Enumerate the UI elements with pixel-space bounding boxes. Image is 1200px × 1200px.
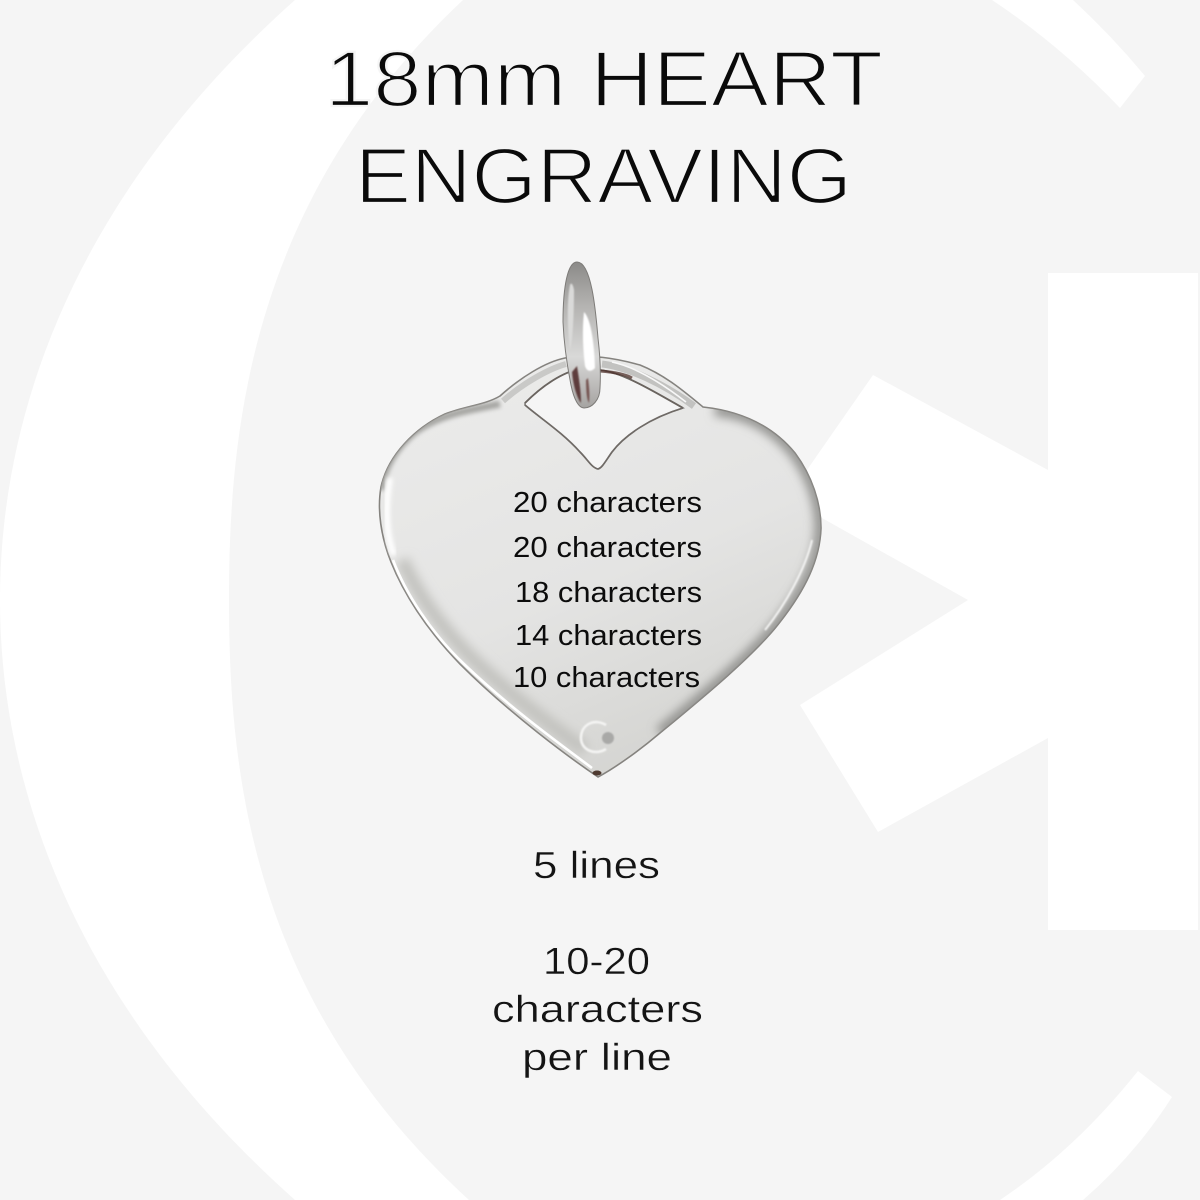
title: ENGRAVING [355, 131, 852, 220]
engraving character guide [513, 487, 702, 694]
characters per line text: characters [492, 989, 703, 1031]
heart body with bale [379, 356, 821, 777]
title: 18mm HEART [325, 34, 883, 123]
soft edge shading [381, 404, 821, 768]
jump ring [563, 262, 600, 408]
heart tip mark [592, 770, 602, 776]
maker stamp [581, 722, 614, 752]
characters per line text [492, 941, 703, 1079]
line count text: 5 lines [533, 845, 660, 887]
characters per line text: per line [522, 1037, 672, 1079]
engraving character guide: 10 characters [513, 662, 700, 694]
title [325, 34, 883, 220]
engraving character guide: 20 characters [513, 487, 702, 519]
bale [503, 362, 694, 469]
engraving character guide: 14 characters [515, 620, 702, 652]
engraving character guide: 18 characters [515, 577, 702, 609]
engraving character guide: 20 characters [513, 532, 702, 564]
heart pendant illustration [379, 262, 821, 777]
characters per line text: 10-20 [543, 941, 650, 983]
